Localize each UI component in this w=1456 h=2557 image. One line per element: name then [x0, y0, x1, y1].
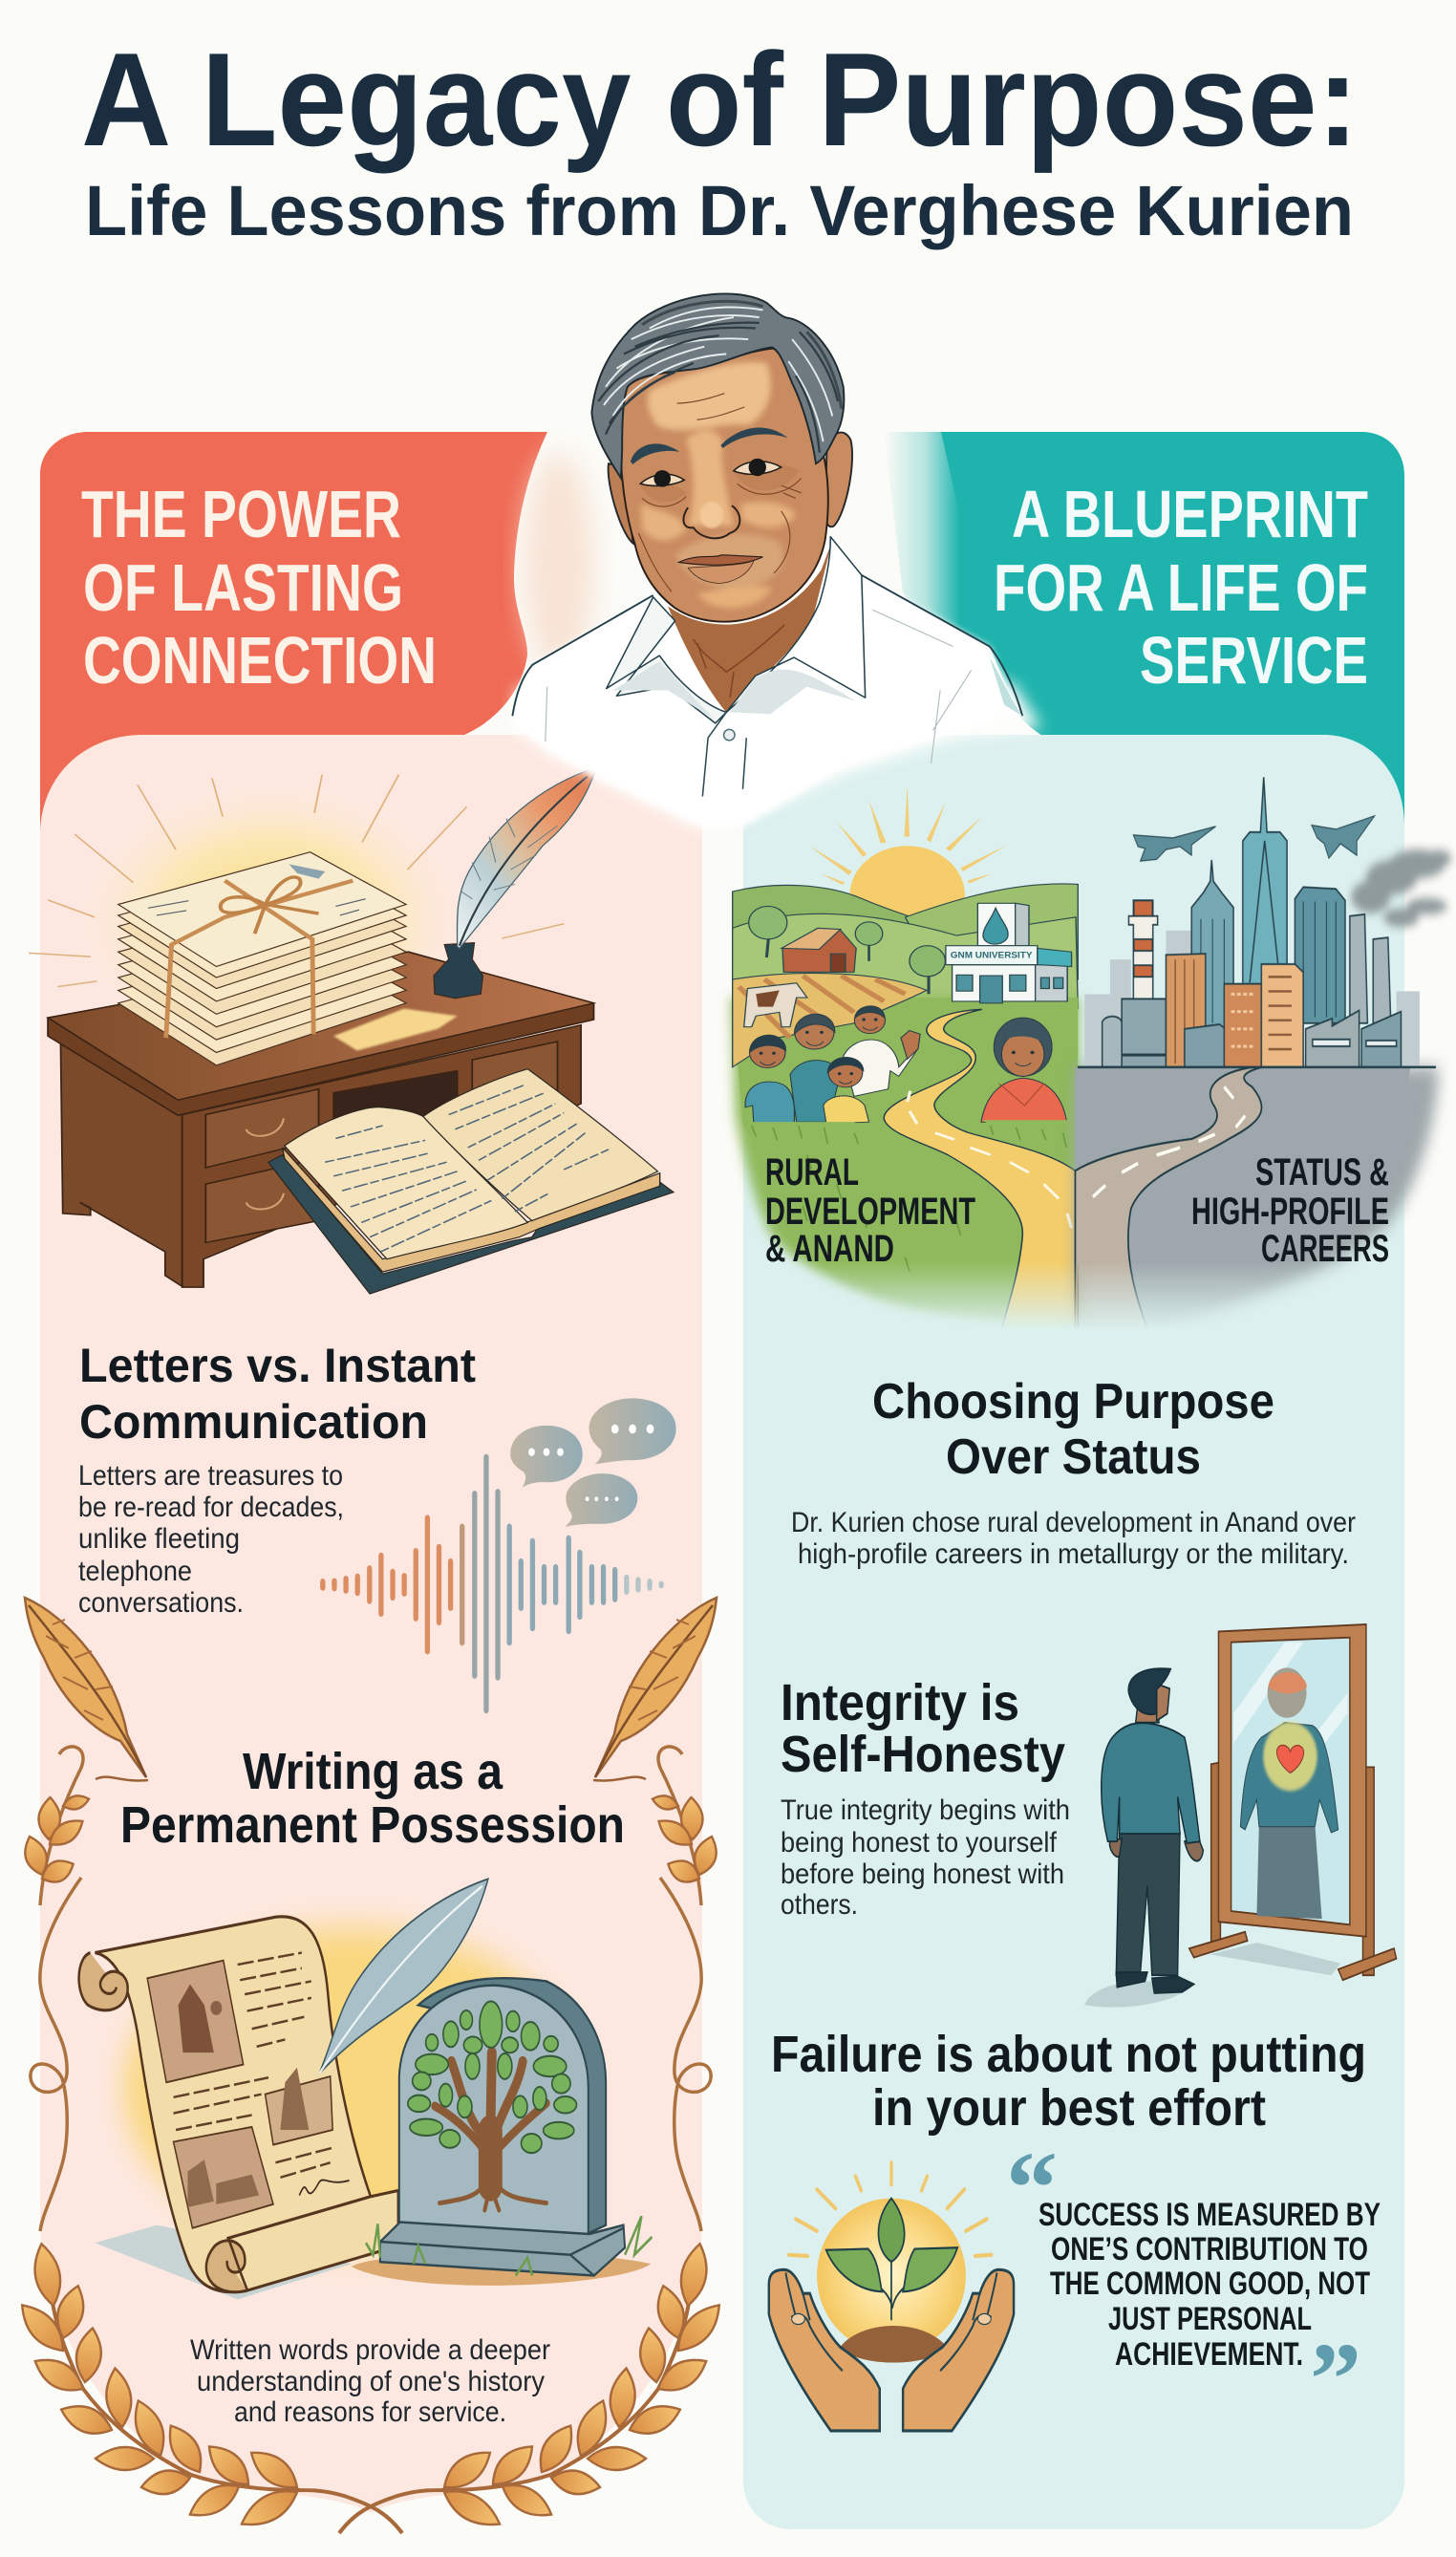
quote mark: closing: ” [1310, 2323, 1361, 2437]
labels: rural development and status: RURAL [765, 1151, 859, 1193]
heading: choosing purpose over status [872, 1374, 1274, 1485]
heading: failure is about not putting in your best effort: in your best effort [872, 2079, 1266, 2137]
illustration: man before mirror [1084, 1624, 1397, 2008]
mouth [678, 555, 763, 565]
jets [1133, 816, 1375, 861]
skyscrapers [1191, 777, 1391, 1029]
grass in front of villagers [753, 1120, 1068, 1156]
labels: rural development and status: DEVELOPMENT [765, 1191, 975, 1233]
scroll [79, 1917, 398, 2292]
panel: service background [743, 735, 1404, 2529]
left hand [769, 2269, 880, 2431]
title [81, 26, 1359, 250]
panel header: the power of lasting connection: THE POWER [81, 477, 401, 551]
panel header: a blueprint for a life of service: SERVICE [1140, 623, 1368, 698]
eyebrows [631, 443, 679, 464]
under-eye shade [640, 462, 800, 502]
soil mound [840, 2326, 947, 2363]
labels: rural development and status: STATUS & [1255, 1151, 1389, 1193]
text block: true integrity: before being honest with [781, 1859, 1064, 1890]
text block: true integrity: True integrity begins with [781, 1794, 1070, 1826]
panel header: a blueprint for a life of service [884, 432, 1404, 841]
factories [1306, 1010, 1401, 1067]
heading: failure is about not putting in your best effort [771, 2026, 1366, 2137]
labels: rural development and status: CAREERS [1261, 1228, 1389, 1270]
light rays [29, 775, 564, 987]
gold quill [25, 1598, 148, 1781]
mother [790, 1014, 842, 1122]
heading: letters vs instant communication [79, 1339, 476, 1449]
woman in coral [981, 1018, 1067, 1126]
dairy university building [946, 903, 1072, 1003]
illustration: crossroads city side [1075, 777, 1451, 1353]
text block: letters are treasures [78, 1460, 344, 1619]
text block: letters are treasures: telephone [78, 1556, 192, 1587]
heading: integrity is self-honesty: Self-Honesty [781, 1726, 1065, 1783]
sun disc and rays [789, 2162, 992, 2353]
collar [607, 537, 866, 723]
quote text: success is measured: ONE’S CONTRIBUTION TO [1051, 2231, 1368, 2267]
horizon line [1078, 1065, 1437, 1068]
text block: letters are treasures: unlike fleeting [78, 1523, 240, 1555]
mirror stand and frame [1189, 1624, 1397, 1980]
trees [749, 906, 945, 994]
striped chimney and tank [1101, 899, 1166, 1066]
shirt [512, 537, 1022, 826]
heading: letters vs instant communication: Letters vs. Instant [79, 1339, 476, 1392]
icon: sound waveform and speech bubbles [323, 1398, 676, 1710]
quill feather [457, 767, 597, 948]
mid-rise buildings [1166, 954, 1303, 1067]
hair [591, 293, 844, 478]
waveform [323, 1457, 661, 1710]
dairy university building: GNM UNIVERSITY [951, 951, 1033, 960]
text block: written words: and reasons for service. [234, 2396, 506, 2428]
ground shadow [95, 2225, 352, 2299]
heading: choosing purpose over status: Choosing Purpose [872, 1374, 1274, 1429]
text block: true integrity: others. [781, 1889, 858, 1921]
sun and rays [810, 785, 1007, 915]
hills [733, 884, 1078, 1009]
man waving [844, 1006, 920, 1096]
mirror reflection [1240, 1667, 1338, 1919]
grey road [1075, 1067, 1261, 1353]
wrinkles [638, 394, 790, 591]
labels: rural development and status: & ANAND [765, 1228, 894, 1270]
panel: lasting connection background [40, 735, 702, 2513]
heading: integrity is self-honesty [781, 1674, 1065, 1783]
quote mark: opening: “ [1006, 2132, 1058, 2245]
face [621, 349, 828, 622]
heading: choosing purpose over status: Over Status [946, 1429, 1201, 1485]
right hand [903, 2269, 1014, 2431]
light patch on desk [333, 1009, 458, 1051]
ornament: laurel wreath right branch [339, 2242, 728, 2535]
tree carving [408, 2002, 577, 2210]
illustration: letters, desk, inkwell and open journal [29, 767, 674, 1294]
villagers [745, 1006, 1067, 1126]
illustration: crossroads rural side [731, 785, 1078, 1330]
text block: dr kurien chose rural development: high-profile careers in metallurgy or the military. [798, 1538, 1349, 1570]
desk body [48, 952, 593, 1287]
skyline silhouettes [1084, 931, 1420, 1067]
illustration: scroll, quill and gravestone with tree [79, 1879, 652, 2299]
floor shadows [1084, 1943, 1340, 2008]
upper vine [20, 1747, 91, 1905]
inkwell [434, 943, 482, 999]
boy [745, 1035, 794, 1126]
open journal [268, 1069, 674, 1294]
text block: letters are treasures: be re-read for decades, [78, 1492, 344, 1523]
glow behind letters [67, 775, 477, 1067]
eyes [640, 474, 684, 485]
smoke [1351, 849, 1451, 927]
heading: failure is about not putting in your best effort: Failure is about not putting [771, 2026, 1366, 2083]
panel header: a blueprint for a life of service: A BLUEPRINT [1012, 477, 1368, 551]
text block: written words: Written words provide a deeper [190, 2334, 550, 2366]
quote text: success is measured: JUST PERSONAL [1108, 2301, 1312, 2337]
man seen from behind [1102, 1668, 1203, 1993]
heading: writing as a permanent possession: Permanent Possession [120, 1796, 625, 1854]
white fade from shirt into panels [516, 683, 1041, 827]
neck [668, 541, 832, 712]
nose [700, 502, 723, 528]
heading: letters vs instant communication: Communication [79, 1395, 428, 1449]
ornament: quill and vine border, left [20, 1598, 148, 2231]
text block: written words: understanding of one's history [197, 2366, 545, 2397]
text block: true integrity: being honest to yourself [781, 1827, 1058, 1859]
panel header: the power of lasting connection [40, 432, 593, 841]
speech bubbles [510, 1398, 676, 1527]
journal handwriting [325, 1085, 609, 1252]
panel header: the power of lasting connection: OF LASTING [83, 550, 403, 625]
icon: hands holding seedling [769, 2162, 1014, 2431]
yellow road [884, 1009, 1078, 1330]
text block: dr kurien chose rural development [791, 1507, 1356, 1570]
grey ground [1075, 1067, 1438, 1342]
text block: letters are treasures: conversations. [78, 1587, 244, 1619]
title: A Legacy of Purpose: [81, 26, 1359, 174]
placket and button [702, 712, 746, 796]
heading: writing as a permanent possession [120, 1743, 625, 1854]
seedling [826, 2199, 957, 2320]
quote text: success is measured [1038, 2197, 1381, 2373]
text block: written words [190, 2334, 550, 2428]
lower vine [31, 1878, 81, 2231]
grey quill [319, 1879, 488, 2074]
text block: letters are treasures: Letters are treasures to [78, 1460, 343, 1492]
grass tufts [366, 2216, 652, 2276]
text block: true integrity [781, 1794, 1070, 1921]
warm glow [123, 1927, 580, 2249]
green ground [731, 998, 1078, 1326]
portrait: Dr. Kurien [512, 293, 1022, 826]
bundle of letters [118, 852, 406, 1065]
ornament: laurel wreath left branch [13, 2242, 402, 2535]
quote text: success is measured: ACHIEVEMENT. [1115, 2336, 1303, 2373]
ears [609, 433, 852, 544]
ornament: quill and vine border, right [593, 1598, 721, 2231]
heading: integrity is self-honesty: Integrity is [781, 1674, 1019, 1731]
soft skin lights [640, 362, 796, 608]
heading: writing as a permanent possession: Writing as a [243, 1743, 503, 1800]
child [824, 1057, 869, 1124]
labels: rural development and status [765, 1151, 1389, 1270]
gravestone [380, 1978, 625, 2276]
fields and farm [733, 928, 927, 1067]
title: Life Lessons from Dr. Verghese Kurien [85, 171, 1354, 250]
panel header: the power of lasting connection: CONNECTION [83, 623, 437, 698]
text block: dr kurien chose rural development: Dr. Kurien chose rural development in Anand over [791, 1507, 1356, 1538]
